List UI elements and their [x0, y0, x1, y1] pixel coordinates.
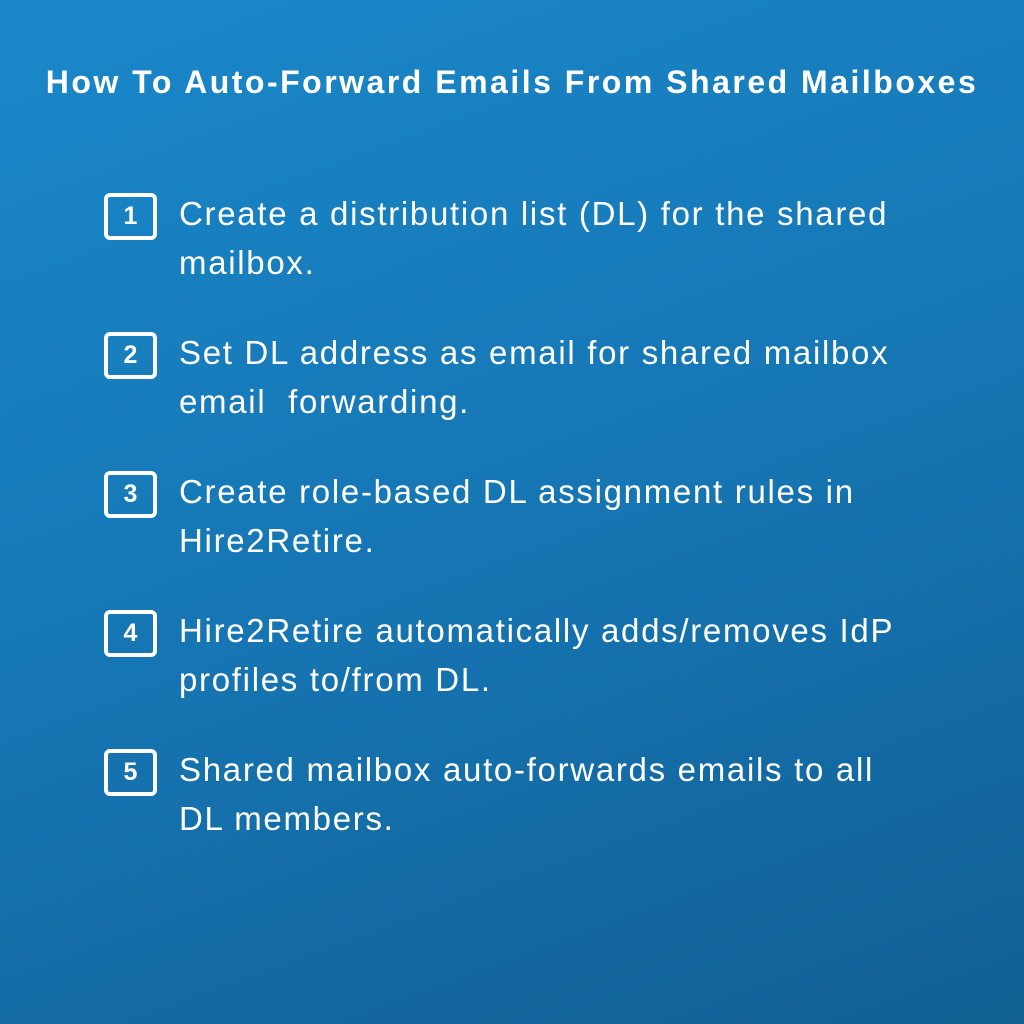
number box 3: 3 — [124, 480, 137, 508]
number box 3 — [104, 471, 157, 518]
step 4 — [104, 610, 894, 698]
step 2 — [104, 332, 889, 420]
step 2 text: email forwarding. — [179, 383, 470, 420]
step 5 text: DL members. — [179, 800, 395, 837]
step 4 text: profiles to/from DL. — [179, 661, 492, 698]
step 5 text: Shared mailbox auto-forwards emails to all — [179, 751, 874, 788]
step 1 text: mailbox. — [179, 244, 315, 281]
step 3 text: Hire2Retire. — [179, 522, 375, 559]
step 1 text: Create a distribution list (DL) for the shared — [179, 195, 888, 232]
number box 4 — [104, 610, 157, 657]
step 1 text — [179, 195, 888, 281]
number box 2: 2 — [124, 341, 137, 369]
step 3 text — [179, 473, 855, 559]
number box 5: 5 — [124, 758, 137, 786]
step 1 — [104, 193, 888, 281]
step 5 text — [179, 751, 874, 837]
step 2 text — [179, 334, 889, 420]
step 4 text: Hire2Retire automatically adds/removes IdP — [179, 612, 894, 649]
step 3 — [104, 471, 855, 559]
step 2 text: Set DL address as email for shared mailbox — [179, 334, 889, 371]
title: How To Auto-Forward Emails From Shared Mailboxes — [46, 64, 978, 100]
step 4 text — [179, 612, 894, 698]
number box 1: 1 — [124, 202, 137, 230]
number box 1 — [104, 193, 157, 240]
step 3 text: Create role-based DL assignment rules in — [179, 473, 855, 510]
number box 5 — [104, 749, 157, 796]
number box 2 — [104, 332, 157, 379]
step 5 — [104, 749, 874, 837]
number box 4: 4 — [124, 619, 137, 647]
